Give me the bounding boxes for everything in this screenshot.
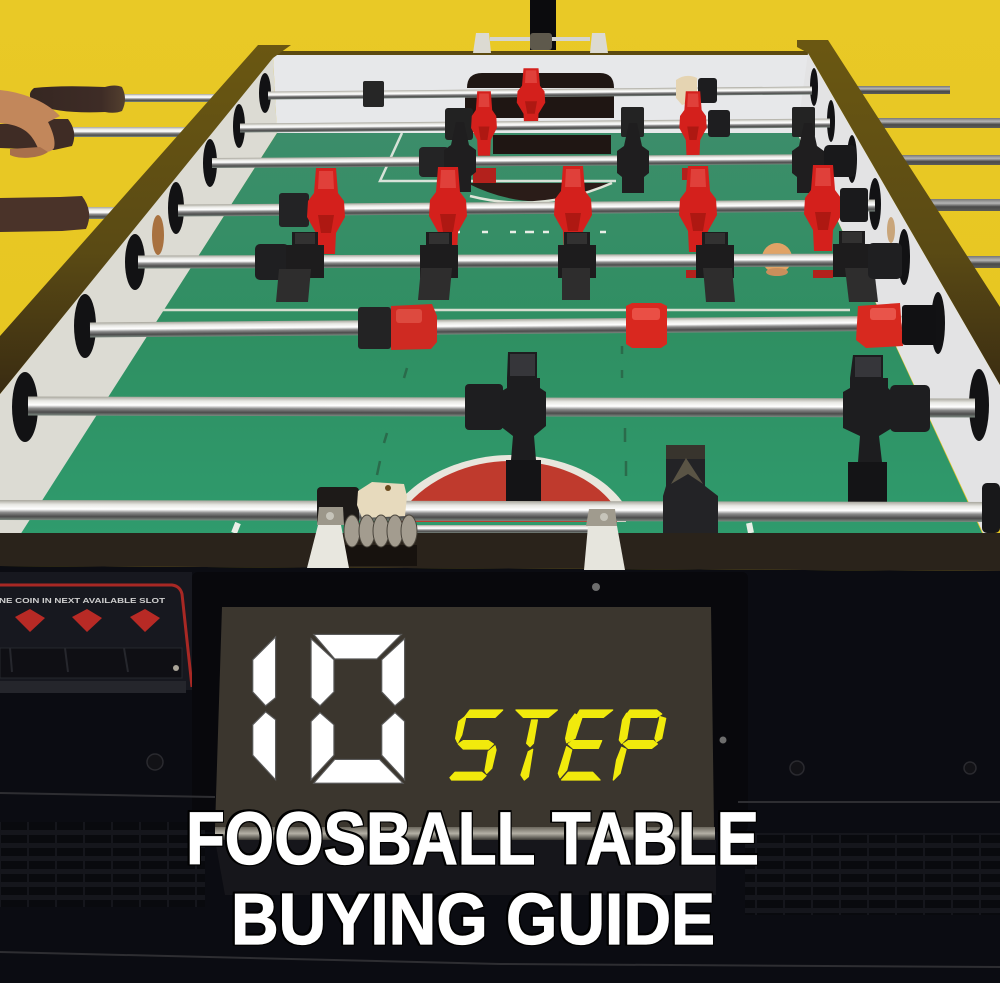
penalty area markings xyxy=(380,133,616,203)
wall bumpers xyxy=(12,68,989,442)
front score slider xyxy=(307,507,625,570)
rod row 3 xyxy=(212,122,856,193)
midfield line and dashes xyxy=(160,232,850,533)
rod row 2 xyxy=(240,91,830,156)
lower panel lines xyxy=(0,793,1000,967)
screws xyxy=(147,754,976,775)
red leg ends behind row 3 xyxy=(445,168,833,278)
coin box xyxy=(0,572,192,693)
seven-segment word STEP xyxy=(450,710,666,780)
handles and player hand xyxy=(0,86,125,232)
small bright screws xyxy=(592,583,726,744)
black support post xyxy=(530,0,556,50)
outer rods xyxy=(72,86,1000,268)
rear score slider xyxy=(473,33,608,53)
centre circle xyxy=(392,455,626,522)
rod row 1 xyxy=(268,68,812,128)
chrome strip under plate xyxy=(215,827,715,840)
back goal xyxy=(465,73,614,154)
back rail xyxy=(270,51,810,56)
title: BUYING GUIDE xyxy=(231,880,715,960)
seven-segment number 10 xyxy=(253,635,404,783)
number plate xyxy=(215,607,714,828)
left rail xyxy=(0,45,291,394)
right rail xyxy=(797,40,1000,385)
coin box: NE COIN IN NEXT AVAILABLE SLOT xyxy=(0,596,166,605)
wall holes xyxy=(152,215,895,255)
rod row 8 xyxy=(0,445,1000,535)
playing field xyxy=(20,133,983,535)
title xyxy=(186,797,759,960)
rod row 6 xyxy=(90,303,936,350)
left side wall xyxy=(0,57,277,533)
rod row 4 xyxy=(178,165,875,254)
front body xyxy=(0,566,1000,983)
rod row 7 xyxy=(28,352,975,502)
lower plate bracket xyxy=(215,840,716,895)
right side wall xyxy=(797,53,1000,533)
title: FOOSBALL TABLE xyxy=(186,797,759,880)
back wall xyxy=(273,55,810,134)
front rail xyxy=(0,533,1000,571)
lower grilles xyxy=(0,822,1000,915)
rod row 5 xyxy=(138,231,902,302)
plate surround xyxy=(192,572,748,832)
ball xyxy=(762,243,792,276)
